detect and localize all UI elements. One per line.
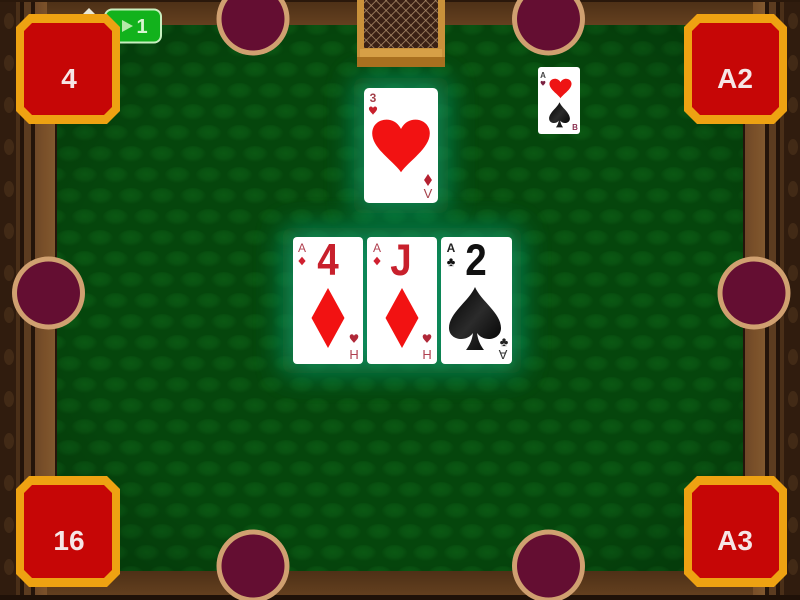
played card: 3 of hearts: V — [424, 186, 433, 201]
small card: opponent's played hearts and spades: A — [540, 71, 546, 80]
player panel: bottom left, 16 — [16, 476, 120, 587]
hand card: 2 of spades: A — [447, 241, 456, 255]
player panel: top right, A2 — [684, 14, 787, 124]
hand card: 2 of spades — [441, 235, 512, 364]
player panel: bottom right, A3 — [684, 476, 787, 587]
hand card: 4 of diamonds: 4 — [317, 235, 339, 285]
player panel: top right, A2: A2 — [717, 63, 753, 94]
hand card: 4 of diamonds: A — [298, 241, 306, 255]
small card: opponent's played hearts and spades: B — [572, 123, 578, 132]
seat: bottom right — [512, 530, 585, 600]
hand card: jack of diamonds: A — [373, 241, 381, 255]
hand card: 4 of diamonds: H — [349, 347, 359, 362]
seat: right — [718, 256, 790, 330]
seat: top left — [216, 0, 290, 56]
hand card: jack of diamonds: J — [390, 235, 412, 285]
small card: opponent's played hearts and spades — [538, 67, 580, 134]
turn indicator badge — [83, 8, 161, 42]
seat: top right — [512, 0, 585, 56]
hand card: jack of diamonds: H — [422, 347, 432, 362]
seat: left — [12, 256, 85, 330]
glow behind hand — [283, 228, 521, 373]
hand card: 2 of spades: ♣ — [500, 334, 509, 349]
glow behind played card — [354, 78, 448, 213]
seat: bottom left — [216, 530, 290, 600]
played card: 3 of hearts — [364, 88, 438, 203]
turn indicator badge: 1 — [136, 16, 148, 38]
hand card: 2 of spades: 2 — [465, 235, 487, 285]
hand card: 2 of spades: ♣ — [447, 254, 456, 269]
hand card: 2 of spades: A — [498, 347, 507, 362]
player panel: top left, 4 — [16, 14, 120, 124]
green felt playing surface — [57, 25, 743, 571]
player panel: bottom right, A3: A3 — [717, 525, 753, 556]
player panel: bottom left, 16: 16 — [53, 525, 85, 556]
played card: 3 of hearts: 3 — [370, 91, 377, 105]
player panel: top left, 4: 4 — [61, 63, 77, 94]
hand card: 4 of diamonds — [293, 235, 363, 364]
hand card: jack of diamonds — [367, 235, 437, 364]
draw deck — [357, 0, 445, 67]
